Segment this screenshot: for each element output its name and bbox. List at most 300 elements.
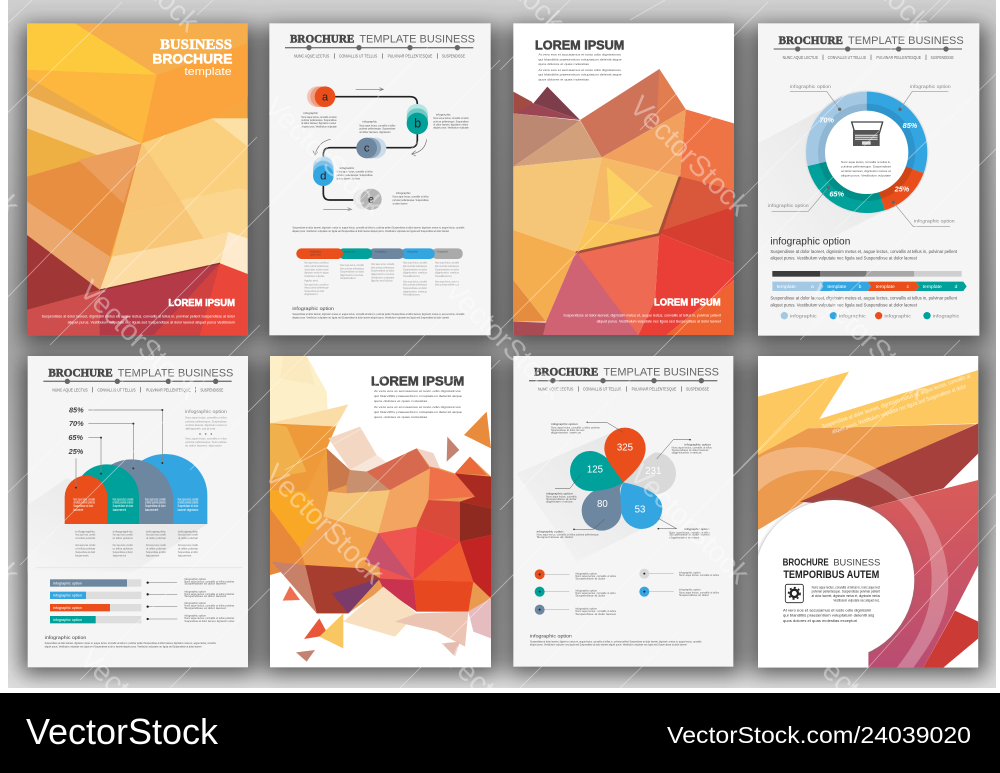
donut centre text xyxy=(841,160,891,177)
dot list: Suspendisse at dolor xyxy=(679,593,709,597)
donut leaders and labels: infographic option xyxy=(910,84,951,90)
petal captions: Suspendisse at dolor laoreet xyxy=(551,428,585,432)
horizontal bar chart xyxy=(50,579,141,623)
footer text: Suspendisse at dolor laoreet, dignissim metus et, augue lectus, convallis at tellus in, pulvinar pellent Suspendisse at dolor laoreet, dignissim metus et, augue lectus, convallis xyxy=(45,641,216,645)
bar annotations: Suspendisse at dolor laoreet xyxy=(184,606,226,610)
node captions: pulvinar pellentesque. Suspendisse xyxy=(433,119,469,123)
icon: gear xyxy=(785,584,803,603)
step columns: Suspendisse at dolor xyxy=(371,269,394,273)
dot list xyxy=(535,569,720,616)
percentage leaders: 65% xyxy=(68,433,83,442)
cover title and intro: qui blanditiis praesentium voluptatum deleniti atque xyxy=(374,394,462,398)
arch captions: infographic xyxy=(113,530,134,533)
petal captions: dignissim metus xyxy=(546,499,574,503)
node captions: pulvinar pellentesque. Suspendisse xyxy=(393,198,429,202)
step columns: Vestibulum xyxy=(403,293,421,297)
quadrant: bottom-right brochures xyxy=(513,356,978,668)
horizontal bar chart: infographic option xyxy=(53,618,82,622)
step columns: tellus pulvinar pellentesque xyxy=(371,265,395,269)
arch captions: infographic xyxy=(75,530,97,533)
watermark pattern: VectorStock xyxy=(73,642,205,773)
brochure header xyxy=(285,34,475,59)
panel: ribbon circle cover xyxy=(753,356,978,668)
dot list: Nunc aque lectus, convallis ut tellus xyxy=(575,609,617,613)
petal chart: 80 xyxy=(597,499,608,510)
bar annotations: Nunc aque lectus, convallis ut tellus pulvinar xyxy=(184,604,234,608)
step columns: tellus pulvinar pellentesque xyxy=(435,264,459,268)
bar annotations: infographic option xyxy=(184,577,207,581)
footer logo: VectorStock xyxy=(26,711,219,752)
brochure header: BROCHURE xyxy=(290,34,354,46)
arch chart: laoreet xyxy=(113,508,126,512)
brochure header xyxy=(43,367,233,392)
dot list: infographic option xyxy=(575,571,598,575)
arch captions: ut tellus pulvinar xyxy=(113,547,133,550)
horizontal bar chart: infographic option xyxy=(53,606,82,610)
watermark pattern: VectorStock xyxy=(73,274,205,407)
cover text: Nunc aque lectus, convallis ut tellus in, nunc aque lect xyxy=(812,585,880,589)
bar annotations: Suspendisse at dolor laoreet, dignissim metus xyxy=(184,619,235,623)
donut chart: 85% xyxy=(903,121,918,130)
legend xyxy=(781,312,960,320)
arch captions xyxy=(75,530,199,558)
second text block xyxy=(770,296,958,308)
flow arrows xyxy=(313,88,427,211)
bar annotations: Nunc aque lectus, convallis ut tellus pulvinar xyxy=(184,580,234,584)
petal leaders xyxy=(555,421,691,530)
donut centre text: pulvinar pellentesque. Suspendisse xyxy=(841,165,891,169)
brochure header: NUNC AQUE LECTUS xyxy=(294,54,329,59)
cover title and intro: LOREM IPSUM xyxy=(371,375,464,389)
brochure header: TEMPLATE BUSINESS xyxy=(848,35,964,47)
template arrow bar: template xyxy=(777,284,796,290)
cover title and intro xyxy=(535,39,624,81)
colour step bar: infographic xyxy=(375,251,387,254)
body text: Suspendisse at dolor laoreet, dignissim metus et, augue lectus, convallis at tellus in, pulvinar pellent Suspendisse at dolor laoreet, dignissim metus et, augue lectus, convallis xyxy=(292,226,465,230)
side text: Nunc aque lectus, convallis ut tellus xyxy=(185,436,227,440)
brochure header: CONVALLIS UT TELLUS xyxy=(583,387,621,392)
arch chart: laoreet xyxy=(145,508,158,512)
arch chart: ut tellus pulvinar pellente xyxy=(73,501,95,505)
cover footer text: aliquet purus. Vestibulum vulputate nec ligula sed Suspendisse at dolor laoreet aliquet purus Vestibulum xyxy=(68,320,235,324)
step columns: Nunc aque lectus, convallis xyxy=(371,262,395,266)
watermark pattern: VectorStock xyxy=(438,274,570,407)
process path xyxy=(323,97,417,200)
petal captions: infographic option xyxy=(684,442,711,446)
arch long shadow xyxy=(28,478,207,572)
side text: aliquet purus xyxy=(185,427,216,431)
node e xyxy=(353,189,382,210)
node b: b xyxy=(414,117,421,131)
bar annotations xyxy=(146,577,235,623)
donut chart: 70% xyxy=(819,115,834,124)
step columns: dignissim metus xyxy=(340,273,364,277)
arch captions: ut tellus pulvinar xyxy=(75,537,96,540)
colour step bar: infographic xyxy=(344,251,356,254)
node captions: aliquet purus. Vestibulum vulputate xyxy=(301,124,337,128)
brochure header: TEMPLATE BUSINESS xyxy=(118,367,233,379)
template arrow bar: a xyxy=(811,284,814,290)
brochure header: SUSPENDISSE xyxy=(931,55,954,60)
step columns: tellus pulvinar pellentesque xyxy=(435,283,459,287)
step columns: Vestibulum xyxy=(403,274,421,278)
donut leaders and labels xyxy=(768,84,955,227)
panel: process infographic brochure xyxy=(269,23,491,335)
petal captions: infographic option xyxy=(546,491,573,495)
step columns: tellus pulvinar pellentesque xyxy=(340,266,364,270)
footer text: aliquet purus. Vestibulum vulputate nec ligula sed Suspendisse at dolor laoreet aliquet purus. Vestibulum vulputate nec ligula sed Suspendisse at dolor laoreet xyxy=(530,643,687,647)
petal captions: infographic option xyxy=(551,422,578,426)
node a xyxy=(307,86,335,107)
panel: orange polygon cover xyxy=(27,23,248,335)
arch captions: laoreet xyxy=(146,555,160,558)
cover footer: aliquet purus. Vestibulum vulputate nec ligula sed Suspendisse at dolor laoreet xyxy=(597,319,721,323)
step columns: Suspendisse at dolor xyxy=(435,267,459,271)
cover title: BROCHURE xyxy=(152,50,232,66)
donut long shadow xyxy=(758,103,887,267)
side text: pulvinar pellentesque. Suspendisse xyxy=(185,440,227,444)
footer text: infographic option xyxy=(530,634,572,640)
petal captions: Nunc aque lectus, convallis ut tellus xyxy=(672,446,712,450)
node captions: pulvinar pellentesque. Suspendisse xyxy=(337,173,373,177)
brochure header: PULVINAR PELLENTESQUE xyxy=(146,387,191,392)
side text: pulvinar pellentesque. Suspendisse xyxy=(185,419,227,423)
arch chart xyxy=(65,454,207,524)
arch captions: Nunc aque lectus, convallis xyxy=(178,534,199,537)
arch chart: Suspendisse at dolor xyxy=(113,504,134,508)
section heading and text: aliquet purus. Vestibulum vulputate nec ligula sed Suspendisse at dolor laoreet xyxy=(770,256,918,262)
arch captions: ut tellus pulvinar xyxy=(178,547,198,550)
panel: polygon burst cover xyxy=(270,356,491,667)
section heading and text: Suspendisse at dolor laoreet, dignissim metus et, augue lectus, convallis at tellus in, pulvinar pellent xyxy=(770,249,958,255)
arch chart: Nunc aque lectus, convallis xyxy=(178,497,198,501)
template arrow bar: template xyxy=(827,284,847,290)
arch chart: Suspendisse at dolor xyxy=(73,504,94,508)
arch captions: ut tellus pulvinar xyxy=(75,547,96,550)
dot list: Suspendisse at dolor laoreet xyxy=(575,612,616,616)
step columns: dignissim metus xyxy=(435,271,460,275)
step columns: tellus pulvinar pellentesque xyxy=(304,264,329,268)
petal captions: Nunc aque lectus, convallis ut tellus pulvinar xyxy=(551,425,600,429)
cover text: At vero eos et accusamus et iusto odio dignissim xyxy=(783,608,872,613)
section heading and text: infographic option xyxy=(770,236,850,247)
brochure header: BROCHURE xyxy=(779,35,843,47)
node captions: at dolor laoreet, dignissim xyxy=(337,176,360,180)
bar annotations: Nunc aque lectus, convallis ut tellus pulvinar xyxy=(184,616,234,620)
petal chart: 53 xyxy=(635,504,645,515)
side text xyxy=(185,409,227,448)
step columns: Suspendisse at dolor xyxy=(403,286,427,290)
legend: infographic xyxy=(790,314,817,320)
cover text: qui blanditiis praesentium voluptatum deleniti atq xyxy=(783,613,874,618)
dot list: infographic option xyxy=(679,570,701,574)
step columns: tellus pulvinar pellentesque xyxy=(403,283,427,287)
arch captions: laoreet xyxy=(178,555,192,558)
petal long shadow xyxy=(517,433,663,562)
step columns: Suspendisse at dolor xyxy=(403,267,427,271)
percentage leaders xyxy=(68,405,163,489)
step columns: Nunc aque lectus, convallis xyxy=(340,263,364,267)
step columns: tellus pulvinar pellentesque xyxy=(403,264,427,268)
step columns: Nunc aque lectus, convallis ut xyxy=(304,282,329,286)
arch captions: laoreet xyxy=(113,555,127,558)
body text xyxy=(292,226,465,233)
legend: infographic xyxy=(933,314,960,320)
second text block: aliquet purus. Vestibulum vulputate nec ligula sed Suspendisse at dolor laoreet xyxy=(770,302,918,308)
footer text: Suspendisse at dolor laoreet, dignissim metus et, augue lectus, convallis at tellus in, pulvinar pellent Suspendisse at dolor laoreet, dignissim metus et, augue lectus, convallis xyxy=(530,639,702,643)
legend: infographic xyxy=(839,314,866,320)
step columns xyxy=(304,261,460,297)
petal captions: Suspendisse at dolor laoreet xyxy=(672,448,709,452)
node c: c xyxy=(364,143,370,155)
step columns: Nunc aque lectus, convallis xyxy=(403,279,427,283)
arch captions: Suspendisse at dolor xyxy=(113,551,133,554)
brochure header: CONVALLIS UT TELLUS xyxy=(339,54,377,59)
node captions xyxy=(301,111,469,205)
arch captions: infographic xyxy=(178,530,199,533)
step columns: Vestibulum xyxy=(435,274,453,278)
dot list: Nunc aque lectus, convallis ut tellus xyxy=(679,590,720,594)
node captions: pulvinar pellentesque. Suspendisse xyxy=(301,118,337,122)
bar annotations: Nunc aque lectus, convallis ut tellus pulvinar xyxy=(184,592,234,596)
petal captions: Nunc aque lectus, convallis xyxy=(546,495,577,499)
grey progress bar xyxy=(772,271,962,277)
brochure header: TEMPLATE BUSINESS xyxy=(603,367,719,379)
section heading and text xyxy=(770,236,958,262)
arch captions: Nunc aque lectus, convallis xyxy=(113,534,133,537)
step columns: Vestibulum xyxy=(340,276,357,280)
cover title and intro: qui blanditiis praesentium voluptatum deleniti atque xyxy=(538,57,622,61)
brochure header: SUSPENDISSE xyxy=(442,54,465,59)
brochure header xyxy=(529,367,719,392)
node captions: at dolor laoreet, dignissim metus xyxy=(433,122,468,126)
colour step bar: infographic xyxy=(310,251,322,254)
petal captions xyxy=(537,422,712,539)
template arrow bar: d xyxy=(955,284,958,290)
side text: at dolor laoreet, dignissim metus et xyxy=(185,423,227,427)
template arrow bar: template xyxy=(923,284,942,290)
icon: laptop xyxy=(852,122,883,146)
brochure header: NUNC AQUE LECTUS xyxy=(783,55,818,60)
node captions: infographic xyxy=(340,166,355,170)
cover title xyxy=(152,37,232,78)
cover title and intro: At vero eos et accusamus et iusto odio dignissimos xyxy=(374,405,461,409)
cover title and intro: quos dolores et quas molestias xyxy=(538,62,590,66)
arch captions: laoreet xyxy=(75,555,89,558)
arch chart: Suspendisse at dolor xyxy=(145,504,166,508)
donut centre text: aliquet purus. Vestibulum vulputate xyxy=(841,173,891,177)
donut leaders and labels: infographic option xyxy=(914,218,955,224)
cover text: Vestibulum vulputate nec aliquet nec. xyxy=(833,599,880,603)
cover text: quos dolores et quas molestias excepturi xyxy=(783,618,857,623)
step columns: ligula sed xyxy=(304,279,318,283)
step columns: Suspendisse at dolor laoreet xyxy=(304,267,329,271)
node captions: infographic xyxy=(362,120,377,124)
colour step bar: option text xyxy=(310,254,321,257)
panel: petal infographic brochure xyxy=(513,356,733,667)
step columns: Suspendisse at dolor xyxy=(304,289,324,293)
cover footer: Suspendisse at dolor laoreet, dignissim metus et, augue lectus, convallis at tellus in, pulvinar pellent xyxy=(563,314,721,318)
colour step bar: infographic xyxy=(407,251,419,254)
donut leaders and labels: infographic option xyxy=(790,84,831,90)
donut chart: 65% xyxy=(829,190,844,199)
second text block: Suspendisse at dolor laoreet, dignissim metus et, augue lectus, convallis at tellus in, pulvinar pellent xyxy=(770,296,958,302)
cover title and intro xyxy=(371,375,464,419)
step columns: Nunc aque lectus, convallis xyxy=(435,261,459,265)
node captions: aliquet purus. Vestibulum vulputate xyxy=(433,126,469,130)
arch captions: Nunc aque lectus, convallis xyxy=(146,534,167,537)
node captions: infographic xyxy=(303,111,318,115)
bar annotations: infographic option xyxy=(184,613,207,617)
step columns: dignissim xyxy=(304,292,319,296)
dot list: infographic option xyxy=(575,588,598,592)
arch captions: ut tellus pulvinar xyxy=(146,537,166,540)
node captions: Nunc aque lectus, convallis ut tellus xyxy=(301,115,337,119)
cover title and intro: qui blanditiis praesentium voluptatum deleniti atque xyxy=(538,73,622,77)
bar annotations: Suspendisse at dolor laoreet xyxy=(184,582,226,586)
brochure header xyxy=(774,35,964,60)
step columns: Nunc aque lectus, convallis xyxy=(435,279,459,283)
step columns: dignissim metus et augue xyxy=(304,271,329,275)
ribbon text: aliquet purus. Vestibulum vulputate nec ligula sed Suspendisse at dolor xyxy=(831,384,967,436)
node captions: at dolor laoreet xyxy=(393,201,407,205)
node a: a xyxy=(322,91,329,103)
cover heading: BROCHURE xyxy=(783,558,829,569)
step columns: Suspendisse at dolor xyxy=(340,270,364,274)
horizontal bar chart: infographic option xyxy=(53,581,82,585)
legend: infographic xyxy=(884,314,912,320)
node b xyxy=(407,104,428,134)
body text: aliquet purus. Vestibulum vulputate nec ligula sed Suspendisse at dolor laoreet aliquet purus. Vestibulum vulputate nec ligula sed Suspendisse at dolor laoreet xyxy=(292,229,449,233)
cover title and intro: quos dolores et quas molestias xyxy=(538,77,590,81)
loose triangles xyxy=(283,412,491,662)
cover title and intro: quos dolores et quas molestias xyxy=(374,415,428,419)
cover title: template xyxy=(184,66,232,78)
node captions: at dolor laoreet, dignissim metus xyxy=(301,121,336,125)
node captions: at dolor laoreet, dignissim xyxy=(359,130,391,134)
arch chart: ut tellus pulvinar pellente xyxy=(145,501,166,505)
step columns: tellus pulvinar pellentesque xyxy=(304,286,329,290)
panel: donut infographic brochure xyxy=(758,23,979,336)
petal captions: Suspendisse at dolor xyxy=(546,497,577,501)
cover title and intro: LOREM IPSUM xyxy=(535,39,624,53)
node c xyxy=(356,138,386,158)
node captions: Nunc aque lectus, convallis ut tellus xyxy=(359,123,396,127)
arch captions: ut tellus pulvinar xyxy=(146,547,166,550)
watermark pattern: VectorStock xyxy=(803,274,935,407)
node d: d xyxy=(320,170,326,182)
template arrow bar xyxy=(772,282,967,291)
arch captions: Nunc aque lectus, convallis xyxy=(146,544,167,547)
arch chart: laoreet dignissim xyxy=(178,508,198,512)
arch captions: ut tellus pulvinar xyxy=(178,537,198,540)
cover title and intro: qui blanditiis praesentium voluptatum deleniti atque xyxy=(374,410,462,414)
step columns: dignissim metus xyxy=(403,271,428,275)
brochure header: PULVINAR PELLENTESQUE xyxy=(876,55,921,60)
footer text xyxy=(45,635,216,648)
cover footer text: Suspendisse at dolor laoreet, dignissim metus et, augue lectus, convallis at tellus in, pulvinar pellent Suspendisse at dolor xyxy=(42,314,236,318)
step columns: dignissim metus xyxy=(371,272,395,276)
petal captions: Suspendisse at dolor laoreet xyxy=(669,533,710,537)
watermark pattern: VectorStock xyxy=(258,458,390,591)
arch chart: laoreet xyxy=(73,508,83,512)
cover heading xyxy=(783,558,880,578)
brochure header: PULVINAR PELLENTESQUE xyxy=(632,387,676,392)
footer image id: VectorStock.com/24039020 xyxy=(667,722,971,748)
watermark pattern: VectorStock xyxy=(803,642,935,773)
bar annotations: infographic option xyxy=(184,589,207,593)
petal chart xyxy=(570,428,676,531)
dot list: Nunc aque lectus, convallis ut tellus xyxy=(575,591,617,595)
dot list: infographic option xyxy=(679,588,701,592)
arch chart: Nunc aque lectus, convallis xyxy=(145,497,166,501)
node captions: Nunc aque lectus, convallis ut tellus xyxy=(337,170,373,174)
donut chart xyxy=(805,90,929,214)
arch captions: Nunc aque lectus, convallis xyxy=(75,544,96,547)
node captions: infographic xyxy=(396,191,411,195)
footer text: aliquet purus. Vestibulum vulputate nec ligula sed Suspendisse at dolor laoreet aliquet purus. Vestibulum vulputate nec ligula sed Suspendisse at dolor laoreet xyxy=(292,315,449,319)
brochure header: BROCHURE xyxy=(534,367,598,379)
template arrow bar: c xyxy=(907,284,910,290)
petal chart: 325 xyxy=(617,442,633,453)
cover title and intro: quos dolores et quas molestias xyxy=(374,399,428,403)
node e: e xyxy=(368,194,374,206)
arch captions: ut tellus pulvinar xyxy=(113,537,133,540)
watermark pattern: VectorStock xyxy=(438,642,570,773)
step columns: ligula sed dolor xyxy=(371,279,393,283)
side text: infographic option xyxy=(185,409,227,415)
cover title: BUSINESS xyxy=(160,37,232,53)
arch captions: Nunc aque lectus, convallis xyxy=(113,544,133,547)
translucent arc xyxy=(758,447,948,668)
step columns: Vestibulum vulputate xyxy=(304,274,325,278)
petal captions: dignissim metus xyxy=(551,430,582,434)
donut centre text: Nunc aque lectus, convallis ut tellus in, xyxy=(841,160,891,164)
watermark pattern: VectorStock xyxy=(623,458,755,591)
watermark pattern: VectorStock xyxy=(623,90,755,223)
node captions: pulvinar pellentesque. Suspendisse xyxy=(359,127,396,131)
petal captions: Nunc aque lectus, convallis ut tellus xyxy=(669,530,711,534)
side text: at dolor laoreet, dignissim xyxy=(185,444,223,448)
panel: polygon mountain cover xyxy=(513,23,734,335)
footer bar xyxy=(0,693,1000,773)
percentage leaders: 70% xyxy=(69,419,84,428)
arch chart: ut tellus pulvinar pellente xyxy=(178,501,198,505)
footer text xyxy=(530,634,702,647)
cover text: pulvinar pellentesque. Suspendisse pulvinar pellent xyxy=(812,590,880,594)
node d xyxy=(313,156,334,186)
footer text xyxy=(292,306,465,319)
footer text: Suspendisse at dolor laoreet, dignissim metus et, augue lectus, convallis at tellus in, pulvinar pellent Suspendisse at dolor laoreet, dignissim metus et, augue lectus, convallis xyxy=(292,312,465,316)
template arrow bar: b xyxy=(859,284,862,290)
dot list: Suspendisse at dolor xyxy=(575,593,605,597)
brochure header: NUNC AQUE LECTUS xyxy=(538,387,573,392)
footer text: aliquet purus. Vestibulum vulputate nec ligula sed Suspendisse at dolor laoreet aliquet purus. Vestibulum vulputate nec ligula sed Suspendisse at dolor laoreet xyxy=(45,644,201,648)
side text: Nunc aque lectus, convallis ut tellus xyxy=(185,416,227,420)
petal chart: 125 xyxy=(587,464,603,475)
step columns: Nunc aque lectus, convallis xyxy=(403,261,427,265)
arch captions: Nunc aque lectus, convallis xyxy=(178,544,199,547)
brochure header: BROCHURE xyxy=(48,367,113,379)
colour step bar: infographic xyxy=(437,251,449,254)
arch chart: Nunc aque lectus, convallis xyxy=(73,497,95,501)
quadrant: top-right brochures xyxy=(513,23,979,336)
cover title and intro: At vero eos et accusamus et iusto odio dignissimos xyxy=(538,68,622,72)
brochure header: NUNC AQUE LECTUS xyxy=(52,387,88,392)
cover title and intro: At vero eos et accusamus et iusto odio dignissimos xyxy=(374,389,461,393)
quadrant: bottom-left brochures xyxy=(28,356,491,667)
donut chart: 25% xyxy=(894,185,910,194)
